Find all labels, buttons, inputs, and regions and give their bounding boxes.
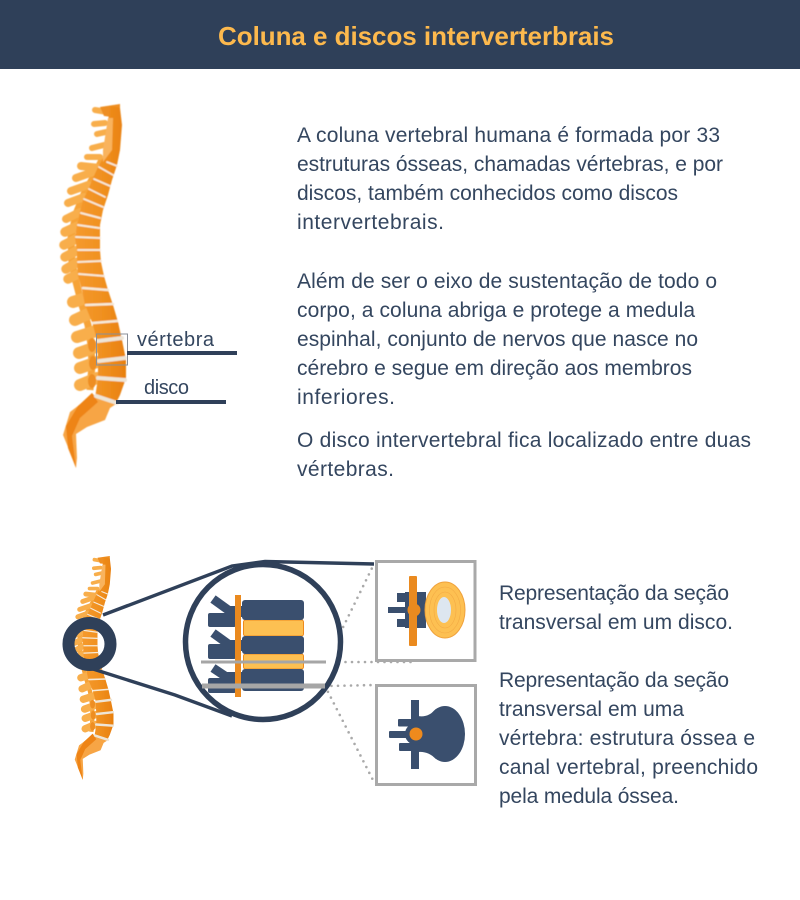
magnifier connector lines [93,562,374,716]
panel: vertebra cross-section [376,686,476,784]
text block: intro [297,124,723,234]
leader line: disco [116,400,226,404]
text block: disc location [297,429,751,481]
section planes [201,660,326,664]
caption: vertebra section: vértebra: estrutura óssea e [499,727,755,750]
magnifier: vertebrae and discs [186,564,340,720]
text block: intro: discos, também conhecidos como discos [297,182,678,205]
text block: disc location: O disco intervertebral fica localizado entre duas [297,429,751,452]
dotted guide lines [325,566,412,784]
caption: disc section: Representação da seção [499,582,729,605]
caption: vertebra section: canal vertebral, preenchido [499,756,758,779]
discs [244,620,304,669]
text block: function of the spine: inferiores. [297,386,395,409]
text block: function of the spine [297,270,717,409]
caption: vertebra section [499,669,758,808]
text block: intro: A coluna vertebral humana é formada por 33 [297,124,720,147]
leader line: vértebra [127,351,237,355]
label: disco: disco [144,377,189,399]
text block: function of the spine: corpo, a coluna abriga e protege a medula [297,299,695,322]
panel: disc cross-section [376,562,475,660]
text block: function of the spine: espinhal, conjunto de nervos que nasce no [297,328,698,351]
caption: disc section [499,582,733,634]
icon: disc [388,576,465,646]
label: vértebra: vértebra [137,329,215,351]
illustration: spine with labels [63,104,237,468]
spinal cord [235,595,241,697]
caption: vertebra section: pela medula óssea. [499,785,679,808]
header bar [0,0,800,69]
magnifier ring: small spine [68,623,110,665]
icon: vertebra [389,700,465,769]
vertebrae [208,599,304,693]
caption: disc section: transversal em um disco. [499,611,733,634]
caption: vertebra section: Representação da seção [499,669,729,692]
highlight box: vertebra [96,334,128,365]
title: Coluna e discos interverterbrais [218,21,614,51]
text block: function of the spine: Além de ser o eixo de sustentação de todo o [297,270,717,293]
text block: intro: estruturas ósseas, chamadas vértebras, e por [297,153,723,176]
small spine illustration [75,556,113,780]
text block: disc location: vértebras. [297,458,394,481]
caption: vertebra section: transversal em uma [499,698,684,721]
text block: function of the spine: cérebro e segue em direção aos membros [297,357,692,380]
text block: intro: intervertebrais. [297,211,444,234]
